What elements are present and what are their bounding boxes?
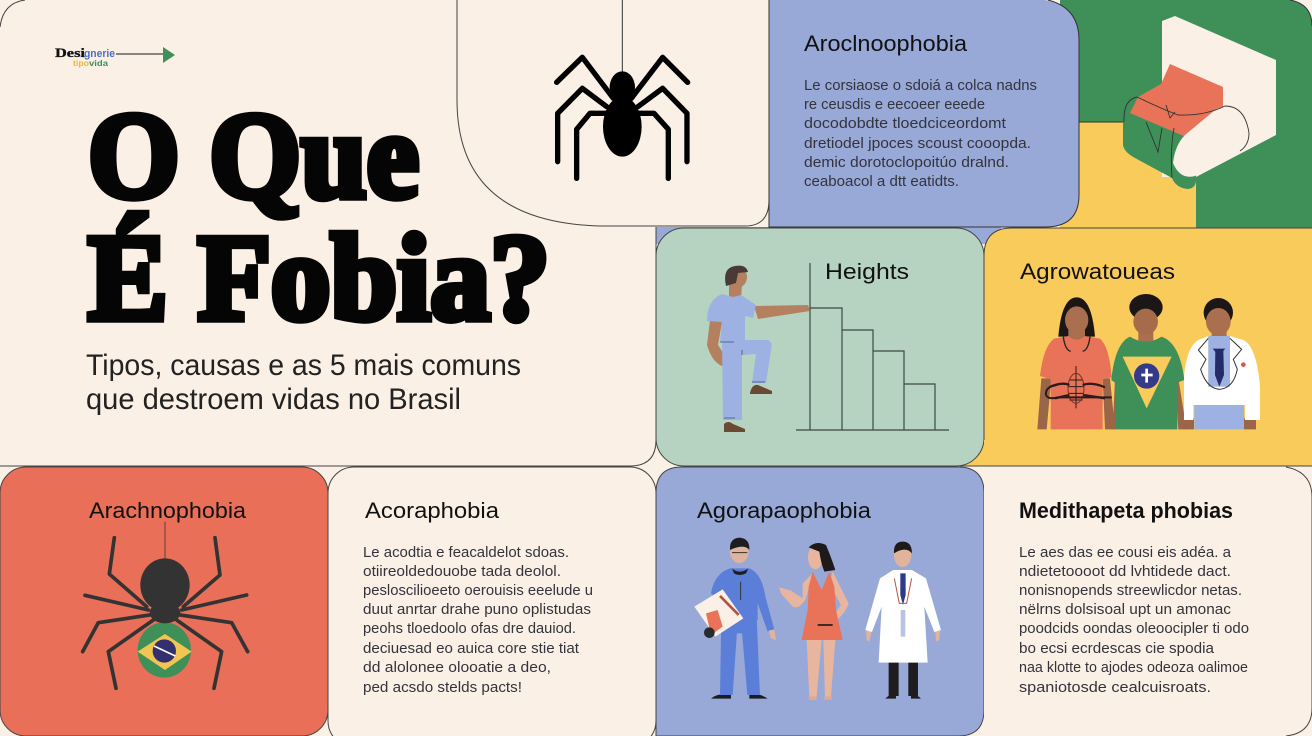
icon: black spider on thread (557, 0, 688, 178)
panel: Aroclnoophobia (769, 0, 1079, 227)
illustration: abstract folded shapes (1123, 16, 1276, 189)
chart: staircase bars (796, 263, 949, 430)
logo with arrow: tipo (73, 59, 89, 68)
panel: Agorapaophobia (656, 467, 984, 736)
logo with arrow: gnerie (84, 48, 115, 60)
panel: hanging spider (457, 0, 769, 226)
body text: nonisnopends streewlicdor netas. (1019, 582, 1242, 599)
panel: title background (0, 0, 770, 466)
body text: dretiodel jpoces scoust cooopda. (804, 135, 1031, 152)
heading: Agorapaophobia (697, 498, 872, 523)
body text (363, 544, 593, 696)
heading: Heights (825, 259, 909, 284)
panel: Arachnophobia (0, 467, 328, 736)
heading: Arachnophobia (89, 498, 247, 523)
panel: Medithapeta phobias (984, 467, 1312, 736)
body text: deciuesad eo auica core stie tiat (363, 640, 580, 657)
body text: ndietetoooot dd lvhtidede dact. (1019, 563, 1231, 580)
logo with arrow: Desi (55, 45, 85, 60)
body text: bo ecsi ecrdescas cie spodia (1019, 640, 1215, 657)
icon: spider with Brazilian flag (83, 522, 248, 688)
body text: poodcids oondas oleoocipler ti odo (1019, 620, 1249, 637)
body text: ped acsdo stelds pacts! (363, 679, 522, 696)
heading: Medithapeta phobias (1019, 498, 1233, 523)
title (88, 87, 550, 346)
body text: duut anrtar drahe puno oplistudas (363, 601, 591, 618)
heading: Agrowatoueas (1020, 259, 1175, 284)
figure: man in Brazil shirt (1111, 294, 1187, 429)
body text: dd alolonee olooatie a deo, (363, 659, 551, 676)
body text: demic dorotoclopoitúo dralnd. (804, 154, 1009, 171)
figure: woman in red dress (779, 543, 849, 700)
icon: insect held in hands (1046, 366, 1112, 408)
title: O Que (88, 87, 419, 224)
subtitle (86, 349, 521, 416)
figure: man climbing stairs (707, 266, 810, 432)
figure: man with newspaper (694, 538, 776, 699)
body text: otiireoldedouobe tada deolol. (363, 563, 561, 580)
figure: doctor in white coat (865, 542, 941, 699)
body text: naa klotte to ajodes odeoza oalimoe (1019, 659, 1248, 676)
figure: doctor in white coat (1184, 298, 1260, 429)
logo with arrow: vida (89, 59, 109, 68)
body text (1019, 544, 1249, 696)
body text: re ceusdis e eecoeer eeede (804, 96, 985, 113)
body text: Le corsiaose o sdoiá a colca nadns (804, 77, 1037, 94)
body text (804, 77, 1037, 190)
heading: Acoraphobia (365, 498, 500, 523)
body text: ceaboacol a dtt eatidts. (804, 173, 959, 190)
panel: Heights (656, 228, 984, 466)
body text: docodobdte tloedciceordomt (804, 115, 1007, 132)
body text: Le aes das ee cousi eis adéa. a (1019, 544, 1232, 561)
body text: spaniotosde cealcuisroats. (1019, 679, 1211, 696)
body text: nëlrns dolsisoal upt un amonac (1019, 601, 1232, 618)
body text: peohs tloedoolo ofas dre dauiod. (363, 620, 576, 637)
subtitle: que destroem vidas no Brasil (86, 383, 461, 416)
body text: pesloscilioeeto oerouisis eeelude u (363, 582, 593, 599)
heading: Aroclnoophobia (804, 31, 968, 56)
body text: Le acodtia e feacaldelot sdoas. (363, 544, 569, 561)
panel: Acoraphobia (328, 467, 656, 736)
title: É Fobia? (88, 209, 550, 346)
figure: woman in red dress (1037, 297, 1115, 429)
subtitle: Tipos, causas e as 5 mais comuns (86, 349, 521, 382)
panel: decorative colour blocks, top right (656, 0, 1312, 466)
logo with arrow (55, 45, 175, 68)
panel: Agrowatoueas (960, 228, 1312, 466)
